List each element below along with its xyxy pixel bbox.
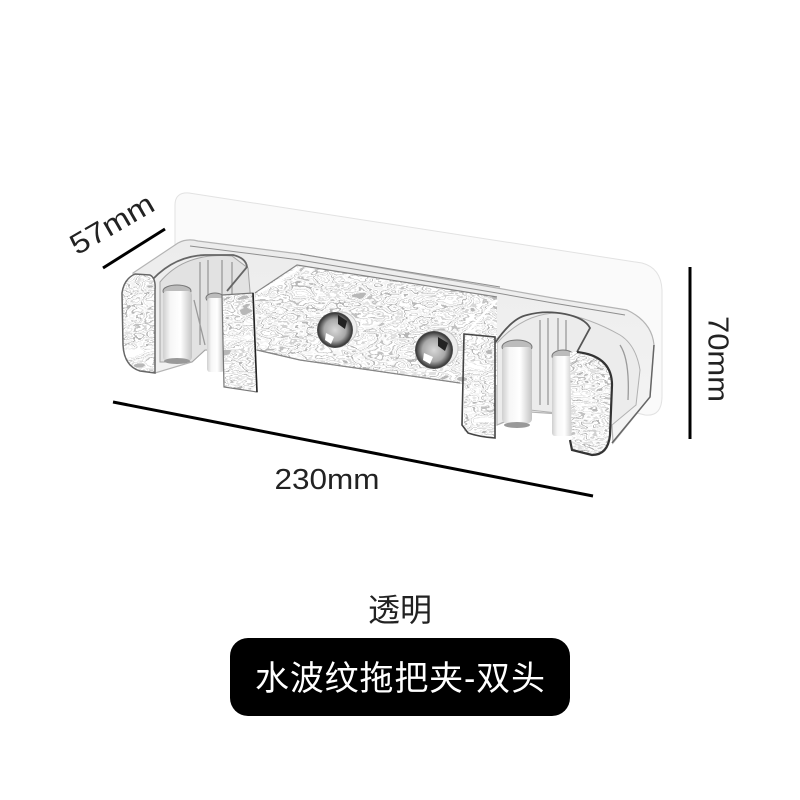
inner cavity left <box>160 256 255 362</box>
right lower housing edge <box>612 345 654 443</box>
back slats right <box>540 318 628 405</box>
left wire <box>153 255 247 291</box>
top ledge lines <box>190 246 625 315</box>
left cap <box>122 275 154 372</box>
dimension: width 230mm <box>113 402 593 496</box>
right front panel outline <box>462 334 495 438</box>
product name badge: 水波纹拖把夹-双头 <box>255 660 545 698</box>
inner cavity right <box>497 313 640 425</box>
left chrome ball <box>317 312 357 348</box>
right front panel <box>464 383 494 437</box>
back housing <box>133 240 654 443</box>
right roller 1 <box>502 340 532 428</box>
dimension: height 70mm: 70mm <box>701 316 733 402</box>
center plate outline <box>255 265 497 383</box>
left cap outline <box>122 274 155 373</box>
right cap <box>570 352 611 454</box>
right wire <box>495 312 590 352</box>
product name badge <box>230 638 570 716</box>
right chrome ball <box>415 330 458 369</box>
dimension: depth 57mm: 57mm <box>64 188 160 262</box>
product: double-head mop clip <box>118 240 654 458</box>
dimension: width 230mm: 230mm <box>274 464 380 496</box>
center plate with water ripple <box>255 266 497 385</box>
colour label: 透明 <box>368 592 432 628</box>
right cap outline <box>570 352 612 455</box>
right roller 2 <box>552 350 574 436</box>
back slats left <box>194 260 232 345</box>
backplate: transparent adhesive panel <box>175 193 662 415</box>
left front panel outline <box>222 293 257 392</box>
left roller 2 <box>206 293 224 372</box>
left roller 1 <box>163 285 192 364</box>
left front panel dark edge <box>253 293 257 392</box>
left front panel <box>222 294 256 390</box>
center plate top bevel <box>258 269 497 334</box>
